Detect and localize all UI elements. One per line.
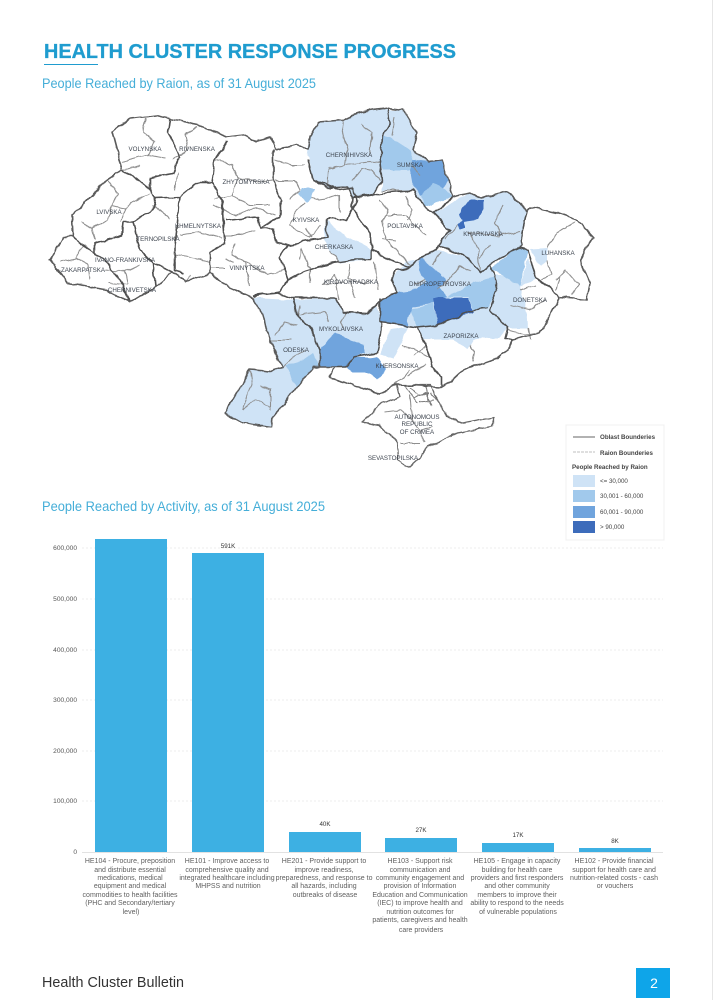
bar value labels	[221, 543, 620, 845]
y axis labels: 300,000	[53, 697, 77, 704]
national outline	[50, 108, 593, 427]
bar value labels: 27K	[415, 827, 427, 834]
map labels: ODESKA	[283, 347, 310, 354]
category label: HE104: level)	[123, 909, 139, 916]
category label: HE105: ability to respond to the needs	[470, 900, 564, 907]
category label: HE201: outbreaks of disease	[293, 892, 357, 899]
category label: HE103: Education and Communication	[372, 892, 468, 899]
category label: HE105: providers and first responders	[471, 875, 564, 882]
bar value labels: 591K	[221, 543, 236, 550]
choropleth fills: second class	[285, 137, 528, 387]
map labels: MYKOLAIVSKA	[319, 326, 364, 333]
category label: HE102: or vouchers	[597, 883, 634, 890]
map labels: RIVNENSKA	[179, 146, 216, 153]
category label: HE105: HE105 - Engage in capacity	[474, 858, 561, 865]
map legend: > 90,000	[600, 524, 625, 531]
bar value labels: 8K	[611, 838, 620, 845]
category label: HE103: community engagement and	[376, 875, 464, 882]
category label: HE104: equipment and medical	[94, 883, 167, 890]
map labels: LUHANSKA	[541, 250, 576, 257]
map labels: DONETSKA	[513, 297, 548, 304]
category label: HE101: MHPSS and nutrition	[195, 883, 261, 890]
map: people reached by raion	[50, 108, 593, 467]
category label: HE103: nutrition outcomes for	[386, 909, 454, 916]
category label: HE105: and other community	[484, 883, 550, 890]
map labels: SUMSKA	[397, 162, 424, 169]
y axis labels: 200,000	[53, 748, 77, 755]
oblast boundaries	[73, 108, 560, 387]
map labels: ZAPORIZKA	[443, 333, 479, 340]
category label: HE104: medications, medical	[97, 875, 163, 882]
map labels: CHERNIHIVSKA	[326, 152, 373, 159]
crimea	[362, 385, 493, 467]
bar value labels: 17K	[512, 832, 524, 839]
category label: HE102: HE102 - Provide financial	[575, 858, 654, 865]
map labels: CHERKASKA	[315, 244, 354, 251]
map labels	[61, 146, 576, 462]
map legend: People Reached by Raion	[572, 464, 648, 471]
map labels: AUTONOMOUS	[395, 414, 439, 421]
category label: HE101: HE101 - Improve access to	[185, 858, 269, 865]
category label: HE104: commodities to health facilities	[83, 892, 178, 899]
map labels: IVANO-FRANKIVSKA	[95, 257, 156, 264]
map legend: 30,001 - 60,000	[600, 493, 644, 500]
map legend: <= 30,000	[600, 478, 628, 485]
map labels: KHERSONSKA	[376, 363, 419, 370]
y axis labels	[53, 545, 77, 856]
category label: HE104: (PHC and Secondary/tertiary	[85, 900, 175, 907]
y axis labels: 600,000	[53, 545, 77, 552]
heading: people reached by raion: People Reached by Raion, as of 31 August 2025	[42, 75, 316, 91]
category label: HE103: (IEC) to improve health and	[377, 900, 463, 907]
map labels: TERNOPILSKA	[136, 236, 181, 243]
bar value labels: 40K	[319, 821, 331, 828]
title: HEALTH CLUSTER RESPONSE PROGRESS	[44, 40, 456, 63]
map legend	[566, 425, 664, 540]
category label: HE104: HE104 - Procure, preposition	[85, 858, 175, 865]
sivash dense boundaries	[405, 386, 440, 405]
category label: HE102: nutrition-related costs - cash	[570, 875, 658, 882]
category label: HE201: preparedness, and response to	[276, 875, 373, 882]
category label: HE103: patients, caregivers and health	[372, 917, 468, 924]
footer: page number	[636, 968, 670, 998]
map legend: Oblast Bounderies	[600, 434, 656, 441]
map legend: 60,001 - 90,000	[600, 509, 644, 516]
category label: HE105: building for health care	[482, 867, 553, 874]
map labels: ZHYTOMYRSKA	[222, 179, 270, 186]
category label: HE104: and distribute essential	[94, 867, 166, 874]
y axis labels: 500,000	[53, 596, 77, 603]
y axis labels: 100,000	[53, 798, 77, 805]
category label: HE201: all hazards, including	[291, 883, 357, 890]
map labels: CHERNIVETSKA	[108, 287, 157, 294]
category label: HE101: comprehensive quality and	[185, 867, 269, 874]
map labels: VINNYTSKA	[229, 265, 265, 272]
footer: page number: 2	[650, 975, 658, 991]
heading: people reached by activity: People Reached by Activity, as of 31 August 2025	[42, 498, 325, 514]
map labels: OF CRIMEA	[400, 429, 435, 436]
map labels: DNIPROPETROVSKA	[409, 281, 472, 288]
raion boundaries	[60, 118, 578, 443]
y axis labels: 0	[73, 849, 77, 856]
category label: HE105: of vulnerable populations	[479, 909, 557, 916]
map labels: SEVASTOPILSKA	[368, 455, 419, 462]
category label: HE201: improve readiness,	[294, 867, 354, 874]
category label: HE103: provision of Information	[384, 883, 457, 890]
choropleth fills: darkest class	[433, 200, 483, 325]
choropleth fills: lightest class	[225, 108, 548, 427]
category label: HE103: communication and	[390, 867, 450, 874]
category label: HE101: integrated healthcare including	[179, 875, 275, 882]
category label: HE105: members to improve their	[477, 892, 557, 899]
category label: HE103: care providers	[399, 927, 444, 934]
y axis labels: 400,000	[53, 647, 77, 654]
map labels: KHMELNYTSKA	[175, 223, 222, 230]
map labels: KYIVSKA	[293, 217, 320, 224]
category label: HE201: HE201 - Provide support to	[282, 858, 366, 865]
map labels: POLTAVSKA	[387, 223, 424, 230]
map labels: VOLYNSKA	[129, 146, 162, 153]
category label: HE103: HE103 - Support risk	[388, 858, 453, 865]
map labels: LVIVSKA	[96, 209, 123, 216]
bar chart: people reached by activity	[53, 539, 663, 934]
map labels: ZAKARPATSKA	[61, 267, 106, 274]
category label: HE102: support for health care and	[572, 867, 656, 874]
map labels: KHARKIVSKA	[463, 231, 504, 238]
map labels: REPUBLIC	[402, 421, 433, 428]
bars	[95, 539, 651, 852]
footer: bulletin name: Health Cluster Bulletin	[42, 975, 184, 991]
map labels: KIROVOHRADSKA	[324, 279, 379, 286]
map land base	[50, 108, 593, 427]
map legend: Raion Bounderies	[600, 450, 654, 457]
choropleth fills: third class	[320, 160, 448, 380]
